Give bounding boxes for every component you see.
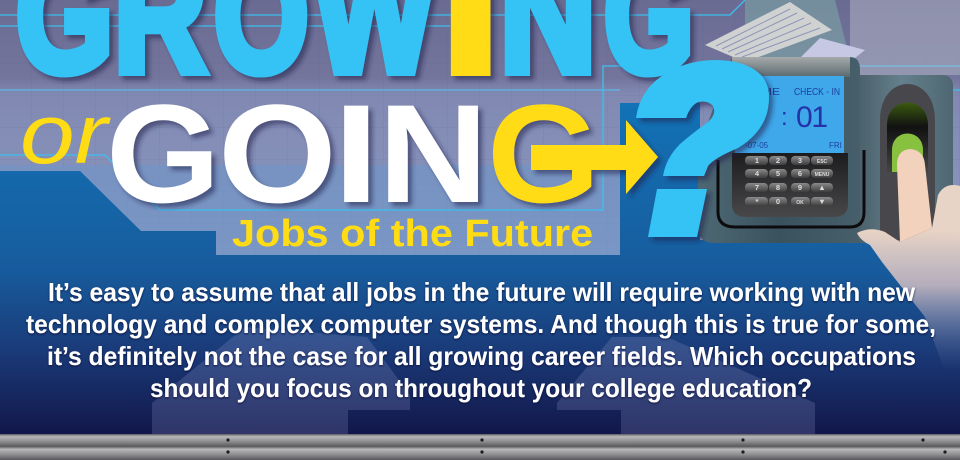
intro paragraph: It’s easy to assume that all jobs in the future will require working with new [48, 277, 916, 307]
title: GROWING [16, 0, 694, 106]
question mark [636, 60, 769, 237]
keypad: ▲ [818, 183, 826, 192]
keypad: 3 [798, 156, 802, 165]
title: GOING with arrow [106, 76, 658, 233]
blue background field [0, 103, 960, 434]
LCD screen: 4 [745, 102, 761, 133]
icon: fingerprint time clock [698, 57, 953, 243]
LCD screen [735, 76, 844, 153]
circuit lines [0, 0, 960, 210]
icon: hand pressing scanner [857, 149, 960, 372]
scanner module [850, 75, 953, 243]
title: GOING with arrow: I [333, 76, 379, 232]
keypad: 2 [776, 156, 780, 165]
keypad: 8 [776, 183, 780, 192]
keypad: 9 [798, 183, 802, 192]
keypad: 7 [755, 183, 759, 192]
LCD screen: -07-05 [745, 141, 769, 150]
intro paragraph: should you focus on throughout your college education? [150, 373, 812, 403]
title: GOING with arrow: N [378, 76, 488, 233]
title: GOING with arrow: O [218, 76, 337, 233]
keypad: MENU [815, 172, 830, 178]
clock body [698, 57, 860, 243]
keypad: ESC [817, 159, 828, 165]
title: GOING with arrow: G [487, 77, 600, 232]
title: GOING with arrow: G [106, 76, 220, 232]
LCD screen: CHECK - IN [794, 87, 840, 98]
keypad: 1 [755, 156, 759, 165]
icon: time sheet papers [705, 0, 960, 75]
LCD screen: : [781, 104, 788, 131]
LCD screen: FRI [829, 141, 842, 150]
keypad: 6 [798, 169, 802, 178]
keypad: OK [796, 200, 804, 206]
keypad: 5 [776, 169, 780, 178]
LCD screen: ME [762, 87, 780, 98]
arrow [531, 120, 658, 194]
title: or: or [20, 88, 111, 181]
keypad: * [756, 197, 759, 206]
keypad: 0 [776, 197, 780, 206]
keypad [732, 153, 848, 217]
subtitle: Jobs of the Future [232, 213, 593, 255]
keypad: 4 [755, 169, 760, 178]
background tech panel [0, 0, 960, 260]
keypad: ▼ [818, 197, 826, 206]
intro paragraph [26, 277, 936, 403]
faded arrows watermark [152, 327, 815, 434]
LCD screen: 01 [796, 101, 828, 134]
intro paragraph: it’s definitely not the case for all growing career fields. Which occupations [47, 341, 916, 371]
metal bars with rivets [0, 434, 960, 460]
